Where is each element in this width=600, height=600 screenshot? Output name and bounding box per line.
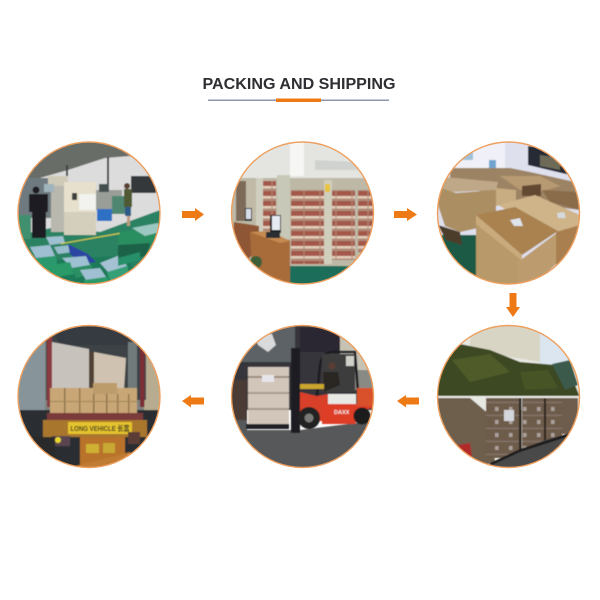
photo: loaded truck container: LONG VEHICLE 长富 <box>70 424 130 433</box>
photo: forklift carrying pallet <box>230 324 374 468</box>
arrow: right 1 <box>182 208 204 221</box>
title underline <box>208 98 389 102</box>
photo: factory floor with green crates <box>15 140 165 292</box>
title: PACKING AND SHIPPING <box>202 76 396 93</box>
photo: wooden crates <box>436 141 580 285</box>
photo: shrink-wrapped pallets by hedge <box>436 324 580 468</box>
photo: loaded truck container <box>17 324 161 468</box>
arrow: right 2 <box>394 208 417 221</box>
photo: forklift carrying pallet: DAXX <box>334 410 350 416</box>
arrow: left 2 <box>397 395 419 408</box>
arrow: left 1 <box>182 395 204 408</box>
arrow: down <box>506 293 520 317</box>
photo: battery testing cabinets <box>230 141 374 285</box>
